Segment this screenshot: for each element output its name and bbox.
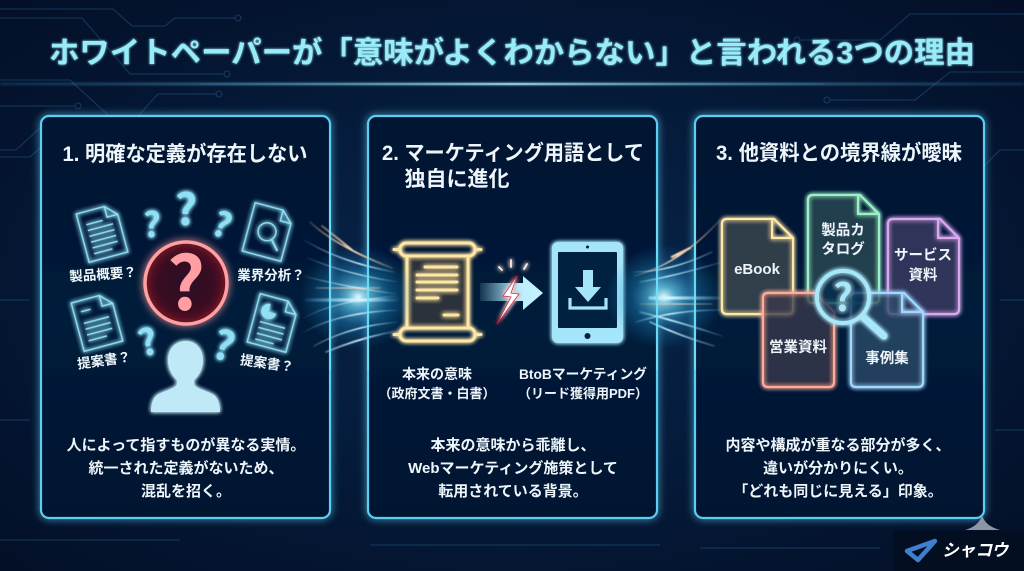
icon: document list <box>76 204 128 262</box>
body text 3: 「どれも同じに見える」印象。 <box>733 482 943 500</box>
body text 2: 本来の意味から乖離し、 <box>430 436 596 454</box>
title: ホワイトペーパーが「意味がよくわからない」と言われる3つの理由 <box>49 36 975 70</box>
icon: document proposal <box>71 293 123 351</box>
heading 1: 1. 明確な定義が存在しない <box>62 142 308 166</box>
label: original meaning: 本来の意味 <box>402 366 472 382</box>
light burst right <box>606 220 722 349</box>
icon: scroll <box>394 243 481 341</box>
icon: small question marks: ? <box>143 198 161 247</box>
body text 1 <box>67 436 305 500</box>
watermark triangle <box>965 515 1000 530</box>
label: eBook: eBook <box>734 261 781 278</box>
label: original meaning: （政府文書・白書） <box>378 386 496 401</box>
body text 1: 統一された定義がないため、 <box>88 459 284 477</box>
icon: lightning <box>497 260 527 324</box>
label: product catalog: タログ <box>821 240 865 258</box>
light burst left <box>300 222 416 352</box>
icon: sales document <box>763 293 834 387</box>
label: BtoB marketing: BtoBマーケティング <box>519 366 647 382</box>
icon: tablet download <box>552 242 623 343</box>
label: BtoB marketing <box>518 366 648 401</box>
icon: document chart <box>247 294 299 352</box>
label: service materials: 資料 <box>908 266 938 284</box>
panel edges over light <box>330 200 695 370</box>
icon: cases document <box>851 293 923 387</box>
icon: large question circle <box>145 225 227 332</box>
icon: catalog document <box>808 195 879 303</box>
heading 2: 独自に進化 <box>404 168 510 191</box>
icon: document search <box>242 203 294 261</box>
icon: magnifier <box>817 267 884 336</box>
label: sales materials: 営業資料 <box>769 338 827 356</box>
heading 2: 2. マーケティング用語として <box>382 141 644 165</box>
icon: eBook document <box>722 219 793 314</box>
body text 1: 混乱を招く。 <box>141 482 231 500</box>
panel: definition <box>41 116 330 518</box>
label: case studies: 事例集 <box>865 349 909 367</box>
heading 3: 3. 他資料との境界線が曖昧 <box>716 141 962 165</box>
body text 3: 内容や構成が重なる部分が多く、 <box>725 436 951 454</box>
label: service materials: サービス <box>894 246 952 264</box>
icon: person <box>151 341 220 412</box>
heading 2 <box>382 141 644 191</box>
body text 2: 転用されている背景。 <box>438 482 588 500</box>
body text 2 <box>408 436 618 500</box>
body text 2: Webマーケティング施策として <box>408 459 618 477</box>
icon: small question marks <box>132 176 242 374</box>
title underline <box>0 83 1024 85</box>
panel: marketing term <box>368 116 657 518</box>
body text 1: 人によって指すものが異なる実情。 <box>67 436 305 454</box>
arrow: transformation <box>480 276 543 310</box>
label: industry analysis: 業界分析？ <box>237 267 305 283</box>
icon: small question marks: ? <box>132 313 163 368</box>
label: original meaning <box>378 366 496 401</box>
label: product overview: 製品概要？ <box>69 264 137 284</box>
label: proposal left: 提案書？ <box>76 348 132 372</box>
label: product catalog <box>821 222 865 258</box>
icon: small question marks: ? <box>207 312 242 374</box>
icon: large question circle: ? <box>167 225 205 332</box>
body text 3 <box>725 436 951 500</box>
body text 3: 違いが分かりにくい。 <box>763 459 913 477</box>
icon: small question marks: ? <box>175 176 197 238</box>
label: service materials <box>894 246 952 284</box>
icon: service document <box>888 219 959 314</box>
logo: Shakou: シャコウ <box>941 540 1012 560</box>
icon: magnifier: ? <box>833 267 853 322</box>
panel: boundary <box>695 116 984 518</box>
icon: small question marks: ? <box>206 197 239 249</box>
label: product catalog: 製品カ <box>821 222 865 239</box>
logo: Shakou <box>893 531 1024 571</box>
label: proposal right: 提案書？ <box>239 351 295 375</box>
label: BtoB marketing: （リード獲得用PDF） <box>518 386 648 401</box>
